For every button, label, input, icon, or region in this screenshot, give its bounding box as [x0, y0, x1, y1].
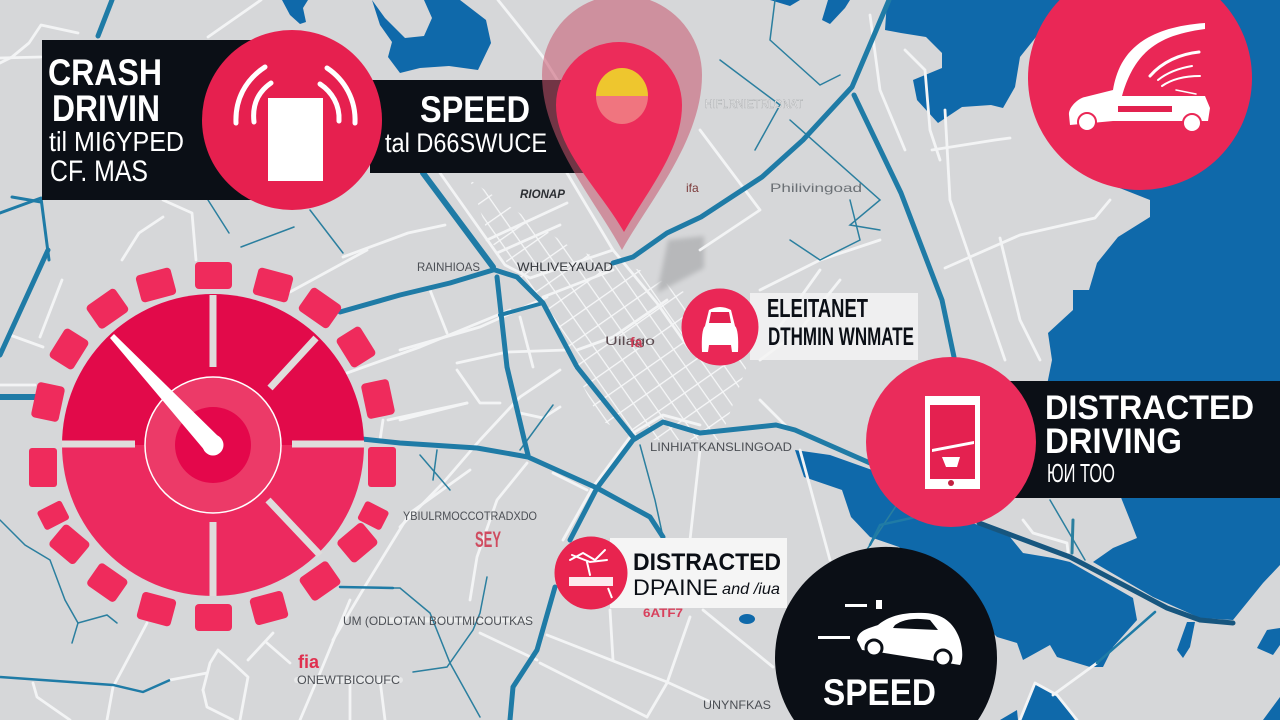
downtown street grid [470, 180, 760, 440]
map labels: Uilago [605, 334, 655, 348]
panel: crash driving [42, 40, 252, 200]
gauge dial [62, 294, 364, 445]
heading line two: DRIVIN [52, 88, 160, 129]
map labels: RAINHIOAS [417, 260, 480, 274]
heading: speed: SPEED [420, 89, 530, 130]
map labels: LINHIATKANSLINGOAD [650, 440, 792, 454]
map labels: 6ATF7 [643, 606, 683, 620]
water bodies [282, 0, 1280, 720]
small callout subtext: DPAINE [633, 575, 718, 600]
subtext line one: til MI6YPED [49, 126, 184, 157]
gauge hub [145, 377, 281, 513]
distracted background [1010, 381, 1280, 498]
subtext line two: CF. MAS [50, 155, 148, 188]
map labels: YBIULRMOCCOTRADXDO [403, 509, 537, 523]
map labels: SEY [475, 527, 501, 552]
callout: electric driving [682, 288, 918, 366]
gauge [29, 262, 396, 631]
icon: crash badge [554, 536, 628, 610]
map labels: WHLIVEYAUAD [517, 260, 613, 274]
small callout note: and /iua [722, 581, 780, 598]
map labels: HIFLRNIETRLONAT [705, 97, 804, 111]
panel background [42, 40, 252, 200]
map labels: fa [630, 334, 643, 350]
icon: front car [682, 288, 758, 366]
small callout heading: DISTRACTED [633, 549, 781, 576]
heading: distracted: DISTRACTED [1045, 389, 1254, 427]
icon: signal device badge [202, 30, 382, 210]
gauge ticks [29, 262, 396, 631]
map labels: UNYNFKAS [703, 698, 771, 712]
heading: driving: DRIVING [1045, 422, 1182, 461]
callout subtext: DTHMIN WNMATE [768, 323, 914, 351]
icon: truck badge [1028, 0, 1252, 190]
map labels: ONEWTBICOUFC [297, 673, 400, 687]
gauge needle [110, 334, 224, 456]
panel: speed [370, 80, 595, 173]
long western teal road [0, 677, 170, 692]
map labels: fia [298, 652, 320, 672]
map labels: UM (ODLOTAN BOUTMICOUTKAS [343, 614, 533, 628]
rail shadow [657, 236, 704, 293]
callout heading: ELEITANET [767, 293, 868, 323]
causeway road [979, 523, 1233, 623]
icon: phone badge [866, 357, 1036, 527]
map labels: ifa [686, 181, 699, 195]
panel: distracted driving [866, 357, 1280, 527]
panel: speed circle [775, 547, 997, 720]
map labels: Philivingoad [770, 181, 862, 195]
map labels [297, 97, 862, 712]
icon: location pin [542, 0, 702, 250]
speed background [370, 80, 595, 173]
callout: distracted small [554, 536, 787, 610]
subtext: ЮИ ТОО [1047, 458, 1115, 488]
small callout background [610, 538, 787, 608]
map labels: RIONAP [520, 187, 566, 201]
heading: speed label: SPEED [823, 672, 936, 713]
callout background [750, 293, 918, 360]
heading: crash drivin: CRASH [48, 52, 162, 93]
icon: car side [818, 600, 962, 666]
subtext: speed: tal D66SWUCE [385, 128, 547, 158]
speed circle background [775, 547, 997, 720]
